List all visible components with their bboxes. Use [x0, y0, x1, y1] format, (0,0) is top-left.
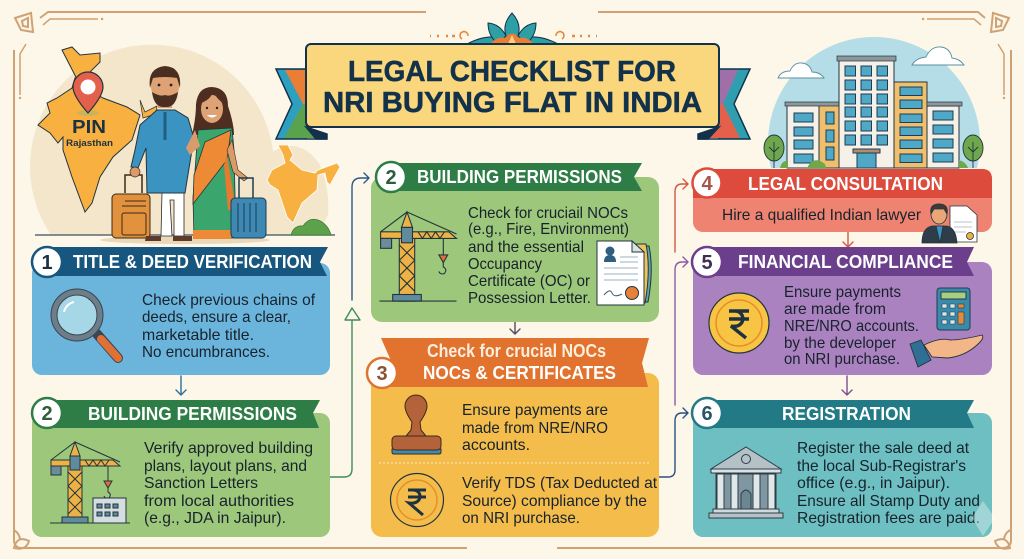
body text: deeds, ensure a clear, — [142, 309, 291, 326]
sparkle watermark — [972, 501, 995, 536]
ribbon heading: 2 — [41, 403, 53, 425]
title text: NRI BUYING FLAT IN INDIA — [323, 87, 702, 119]
body text: Possession Letter. — [468, 290, 591, 307]
orange suitcase — [112, 175, 150, 238]
body text: (e.g., JDA in Jaipur). — [144, 510, 286, 527]
body text — [468, 205, 629, 307]
ribbon heading: Check for crucial NOCs — [427, 341, 606, 361]
ribbon heading: BUILDING PERMISSIONS — [88, 404, 297, 424]
panel: 3 NOCs and certificates — [367, 338, 659, 537]
icon: government building — [709, 447, 783, 518]
map pin — [73, 72, 103, 116]
panel: 6 registration — [692, 398, 995, 537]
trees — [764, 135, 983, 168]
body text bottom: Verify TDS (Tax Deducted at — [462, 475, 658, 492]
icon: rupee coin — [709, 293, 769, 353]
panel: 1 title and deed verification — [32, 247, 330, 375]
body text: Sanction Letters — [144, 475, 258, 492]
blue suitcase — [231, 178, 266, 238]
entrance door — [853, 149, 880, 168]
arrow into 5 — [675, 257, 688, 405]
body text bottom: on NRI purchase. — [462, 510, 580, 527]
ribbon heading — [32, 247, 328, 277]
icon: rupee coin — [390, 474, 444, 526]
arrow into middle panel 2 — [352, 173, 369, 300]
map label Rajasthan: Rajasthan — [66, 138, 113, 148]
body text: Ensure payments — [784, 284, 901, 301]
body text: Verify approved building — [144, 440, 313, 457]
left wing — [787, 105, 819, 168]
arrow into 4 — [675, 179, 688, 252]
illustration: apartment buildings — [764, 37, 983, 168]
body text: on NRI purchase. — [784, 351, 900, 368]
ribbon heading — [692, 398, 974, 428]
beige backdrop — [30, 45, 274, 235]
body text: plans, layout plans, and — [144, 458, 307, 475]
right wings — [894, 82, 927, 168]
small India map — [267, 145, 340, 223]
ribbon heading — [692, 247, 974, 277]
ground line — [35, 234, 335, 236]
body text: and the essential — [468, 239, 584, 256]
panel: 2 building permissions middle — [371, 162, 659, 322]
title text — [323, 56, 702, 119]
body text top: made from NRE/NRO — [462, 420, 608, 437]
body text bottom: Source) compliance by the — [462, 493, 647, 510]
panel: 4 legal consultation — [692, 168, 992, 243]
body text: by the developer — [784, 335, 897, 352]
body text — [797, 440, 980, 527]
body text: from local authorities — [144, 493, 294, 510]
body text: NRE/NRO accounts. — [784, 318, 919, 335]
title banner — [276, 44, 750, 139]
body text: Occupancy — [468, 256, 542, 273]
heading band: 4 — [701, 173, 713, 195]
body text — [144, 440, 313, 527]
ribbon heading: 5 — [701, 252, 713, 274]
body text — [784, 284, 919, 368]
body text top — [462, 402, 608, 454]
ribbon end right — [698, 69, 750, 139]
woman — [186, 87, 248, 239]
icon: lawyer with document — [922, 204, 977, 243]
arrow 5 to 6 — [842, 376, 852, 395]
ribbon end left — [276, 69, 327, 139]
body text: Check for cruciail NOCs — [468, 205, 628, 222]
icon: crane and building — [50, 442, 130, 523]
large India map — [38, 47, 140, 212]
shrubs — [780, 160, 968, 168]
ribbon heading: BUILDING PERMISSIONS — [417, 167, 622, 187]
ribbon heading: FINANCIAL COMPLIANCE — [738, 252, 953, 272]
body text: Registration fees are paid. — [797, 510, 980, 527]
body text: are made from — [784, 301, 886, 318]
man — [130, 66, 193, 241]
icon: open hand — [910, 335, 983, 367]
sky circle — [768, 37, 980, 168]
icon: certificate document — [597, 241, 651, 305]
ribbon heading — [367, 338, 649, 388]
decorative lotus above the title — [430, 13, 597, 44]
arrow 1 to 2 — [176, 376, 186, 395]
ribbon heading: 2 — [385, 167, 397, 189]
ribbon heading: REGISTRATION — [782, 404, 911, 424]
map label PIN: PIN — [72, 117, 106, 137]
icon: rubber stamp — [392, 395, 441, 454]
ribbon heading: 6 — [701, 403, 713, 425]
windows — [794, 66, 953, 163]
connector arrows — [176, 173, 853, 477]
body text top: accounts. — [462, 437, 530, 454]
ribbon heading: 3 — [376, 363, 388, 385]
ribbon heading — [32, 398, 320, 428]
heading band: LEGAL CONSULTATION — [748, 174, 943, 194]
body text: Register the sale deed at — [797, 440, 970, 457]
body text: office (e.g., in Jaipur). — [797, 475, 950, 492]
panel: 5 financial compliance — [692, 247, 992, 375]
panel: 2 building permissions left — [32, 398, 330, 537]
body text: marketable title. — [142, 327, 254, 344]
body text: No encumbrances. — [142, 344, 270, 361]
body text: Ensure all Stamp Duty and — [797, 493, 980, 510]
arrow left column to middle column — [330, 308, 360, 477]
body text: (e.g., Fire, Environment) — [468, 221, 629, 238]
body text bottom — [462, 475, 658, 527]
bush — [291, 219, 331, 235]
clouds — [778, 63, 824, 78]
ribbon heading: TITLE & DEED VERIFICATION — [73, 252, 312, 272]
heading band — [692, 168, 992, 198]
ribbon heading — [376, 162, 642, 192]
icon: crane — [380, 212, 456, 301]
body text: the local Sub-Registrar's — [797, 458, 966, 475]
ribbon heading: 1 — [41, 252, 53, 274]
ribbon heading: NOCs & CERTIFICATES — [423, 363, 616, 383]
body text: Check previous chains of — [142, 292, 316, 309]
icon: magnifying glass — [51, 289, 118, 358]
arrow middle 2 to 3 — [510, 322, 520, 334]
icon: calculator — [937, 288, 970, 330]
body text — [142, 292, 316, 361]
arrow 3 to 6 — [658, 408, 688, 477]
arrow 4 to 5 — [843, 232, 853, 247]
body text: Certificate (OC) or — [468, 273, 591, 290]
banner plate — [306, 44, 719, 127]
illustration: NRI couple with India map — [30, 45, 340, 244]
body text top: Ensure payments are — [462, 402, 608, 419]
central tower — [839, 60, 894, 168]
body text: Hire a qualified Indian lawyer — [722, 207, 922, 224]
title text: LEGAL CHECKLIST FOR — [348, 56, 676, 88]
